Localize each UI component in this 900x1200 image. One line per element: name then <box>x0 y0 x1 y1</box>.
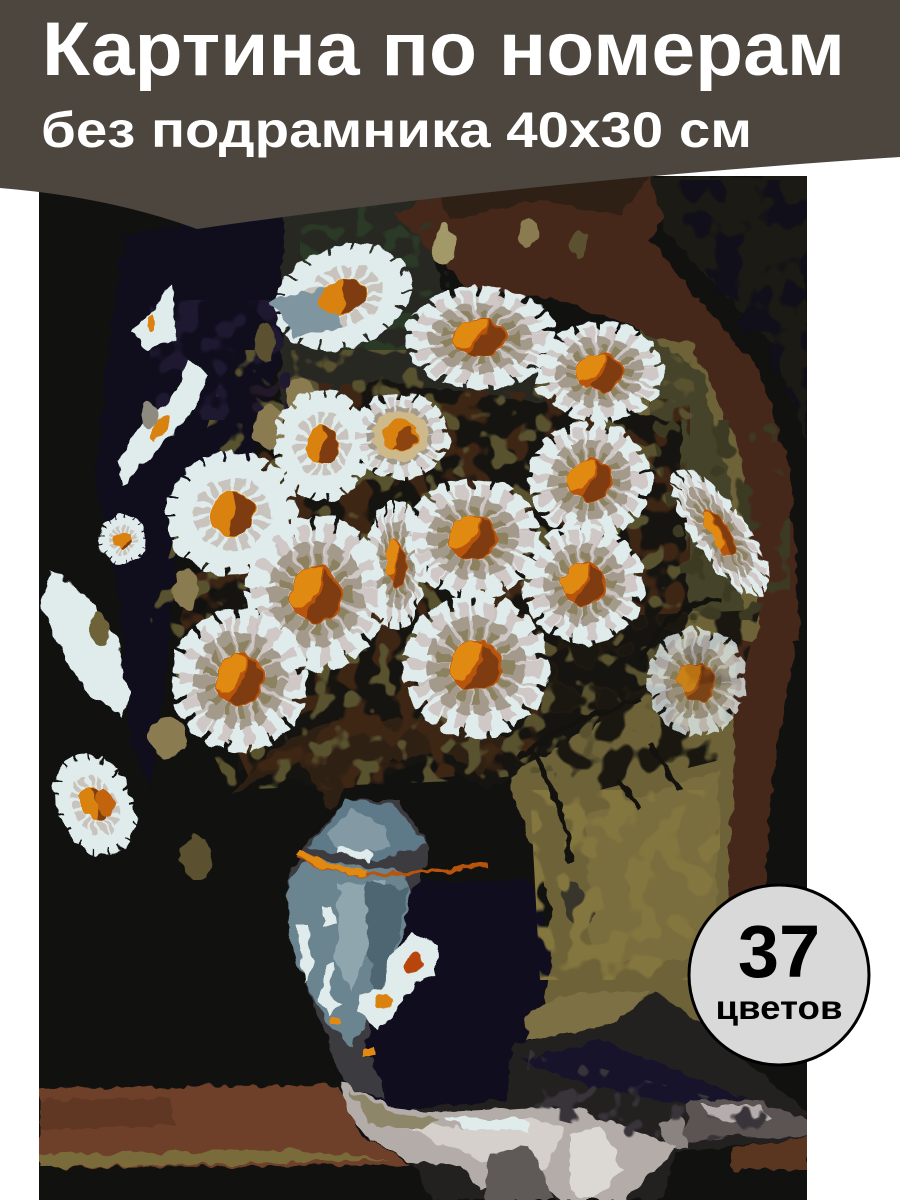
daisy bottom left <box>46 750 144 860</box>
dark upper right <box>650 176 807 440</box>
daisy middle <box>417 488 529 588</box>
daisy upper middle <box>359 400 441 472</box>
badge: 37 colours <box>689 885 869 1065</box>
vase white highlights <box>296 905 342 1015</box>
dark grey wall centre <box>280 200 600 520</box>
white cloth <box>341 1082 677 1200</box>
daisy right lower <box>534 534 634 634</box>
daisy small top left <box>130 284 176 350</box>
vase body <box>340 880 553 1112</box>
daisy top centre <box>417 295 543 381</box>
daisy lower left <box>184 620 296 740</box>
foliage mottling <box>150 180 807 1150</box>
daisy large lower <box>415 606 537 726</box>
header banner <box>0 0 900 229</box>
cloth <box>390 993 807 1200</box>
painting <box>39 176 807 1200</box>
daisy left <box>167 452 297 576</box>
foliage mass <box>349 379 692 778</box>
daisy behind middle <box>371 511 421 619</box>
daisy shaded right <box>656 636 738 728</box>
painting background <box>39 176 807 1200</box>
daisy upper middle left <box>281 397 363 493</box>
daisy top right <box>546 330 654 414</box>
daisy small left <box>102 519 144 561</box>
daisy right middle <box>539 431 641 529</box>
daisy far right <box>665 468 775 598</box>
daisy left narrow <box>116 360 208 485</box>
title: Картина по номерам <box>42 7 845 92</box>
daisy top <box>268 242 412 352</box>
painted backdrop <box>39 176 807 1200</box>
bud on wall <box>562 880 597 928</box>
brown strip right <box>727 638 795 900</box>
buds <box>142 218 587 880</box>
brown wall <box>395 176 800 640</box>
subtitle: без подрамника 40х30 см <box>41 102 752 158</box>
vase blue highlight <box>288 858 410 1045</box>
olive cloth fold <box>525 990 650 1040</box>
badge: 37 colours: 37 <box>738 910 820 993</box>
dark navy backdrop <box>95 205 290 790</box>
vase daisy decoration <box>358 934 438 1030</box>
wall drip strokes <box>520 600 720 865</box>
table <box>39 1085 412 1168</box>
daisies <box>40 218 775 880</box>
badge: 37 colours: цветов <box>716 989 842 1026</box>
daisy centre left <box>257 529 375 659</box>
gold band <box>298 855 485 875</box>
olive background <box>510 340 760 1040</box>
daisy far left <box>40 570 130 716</box>
